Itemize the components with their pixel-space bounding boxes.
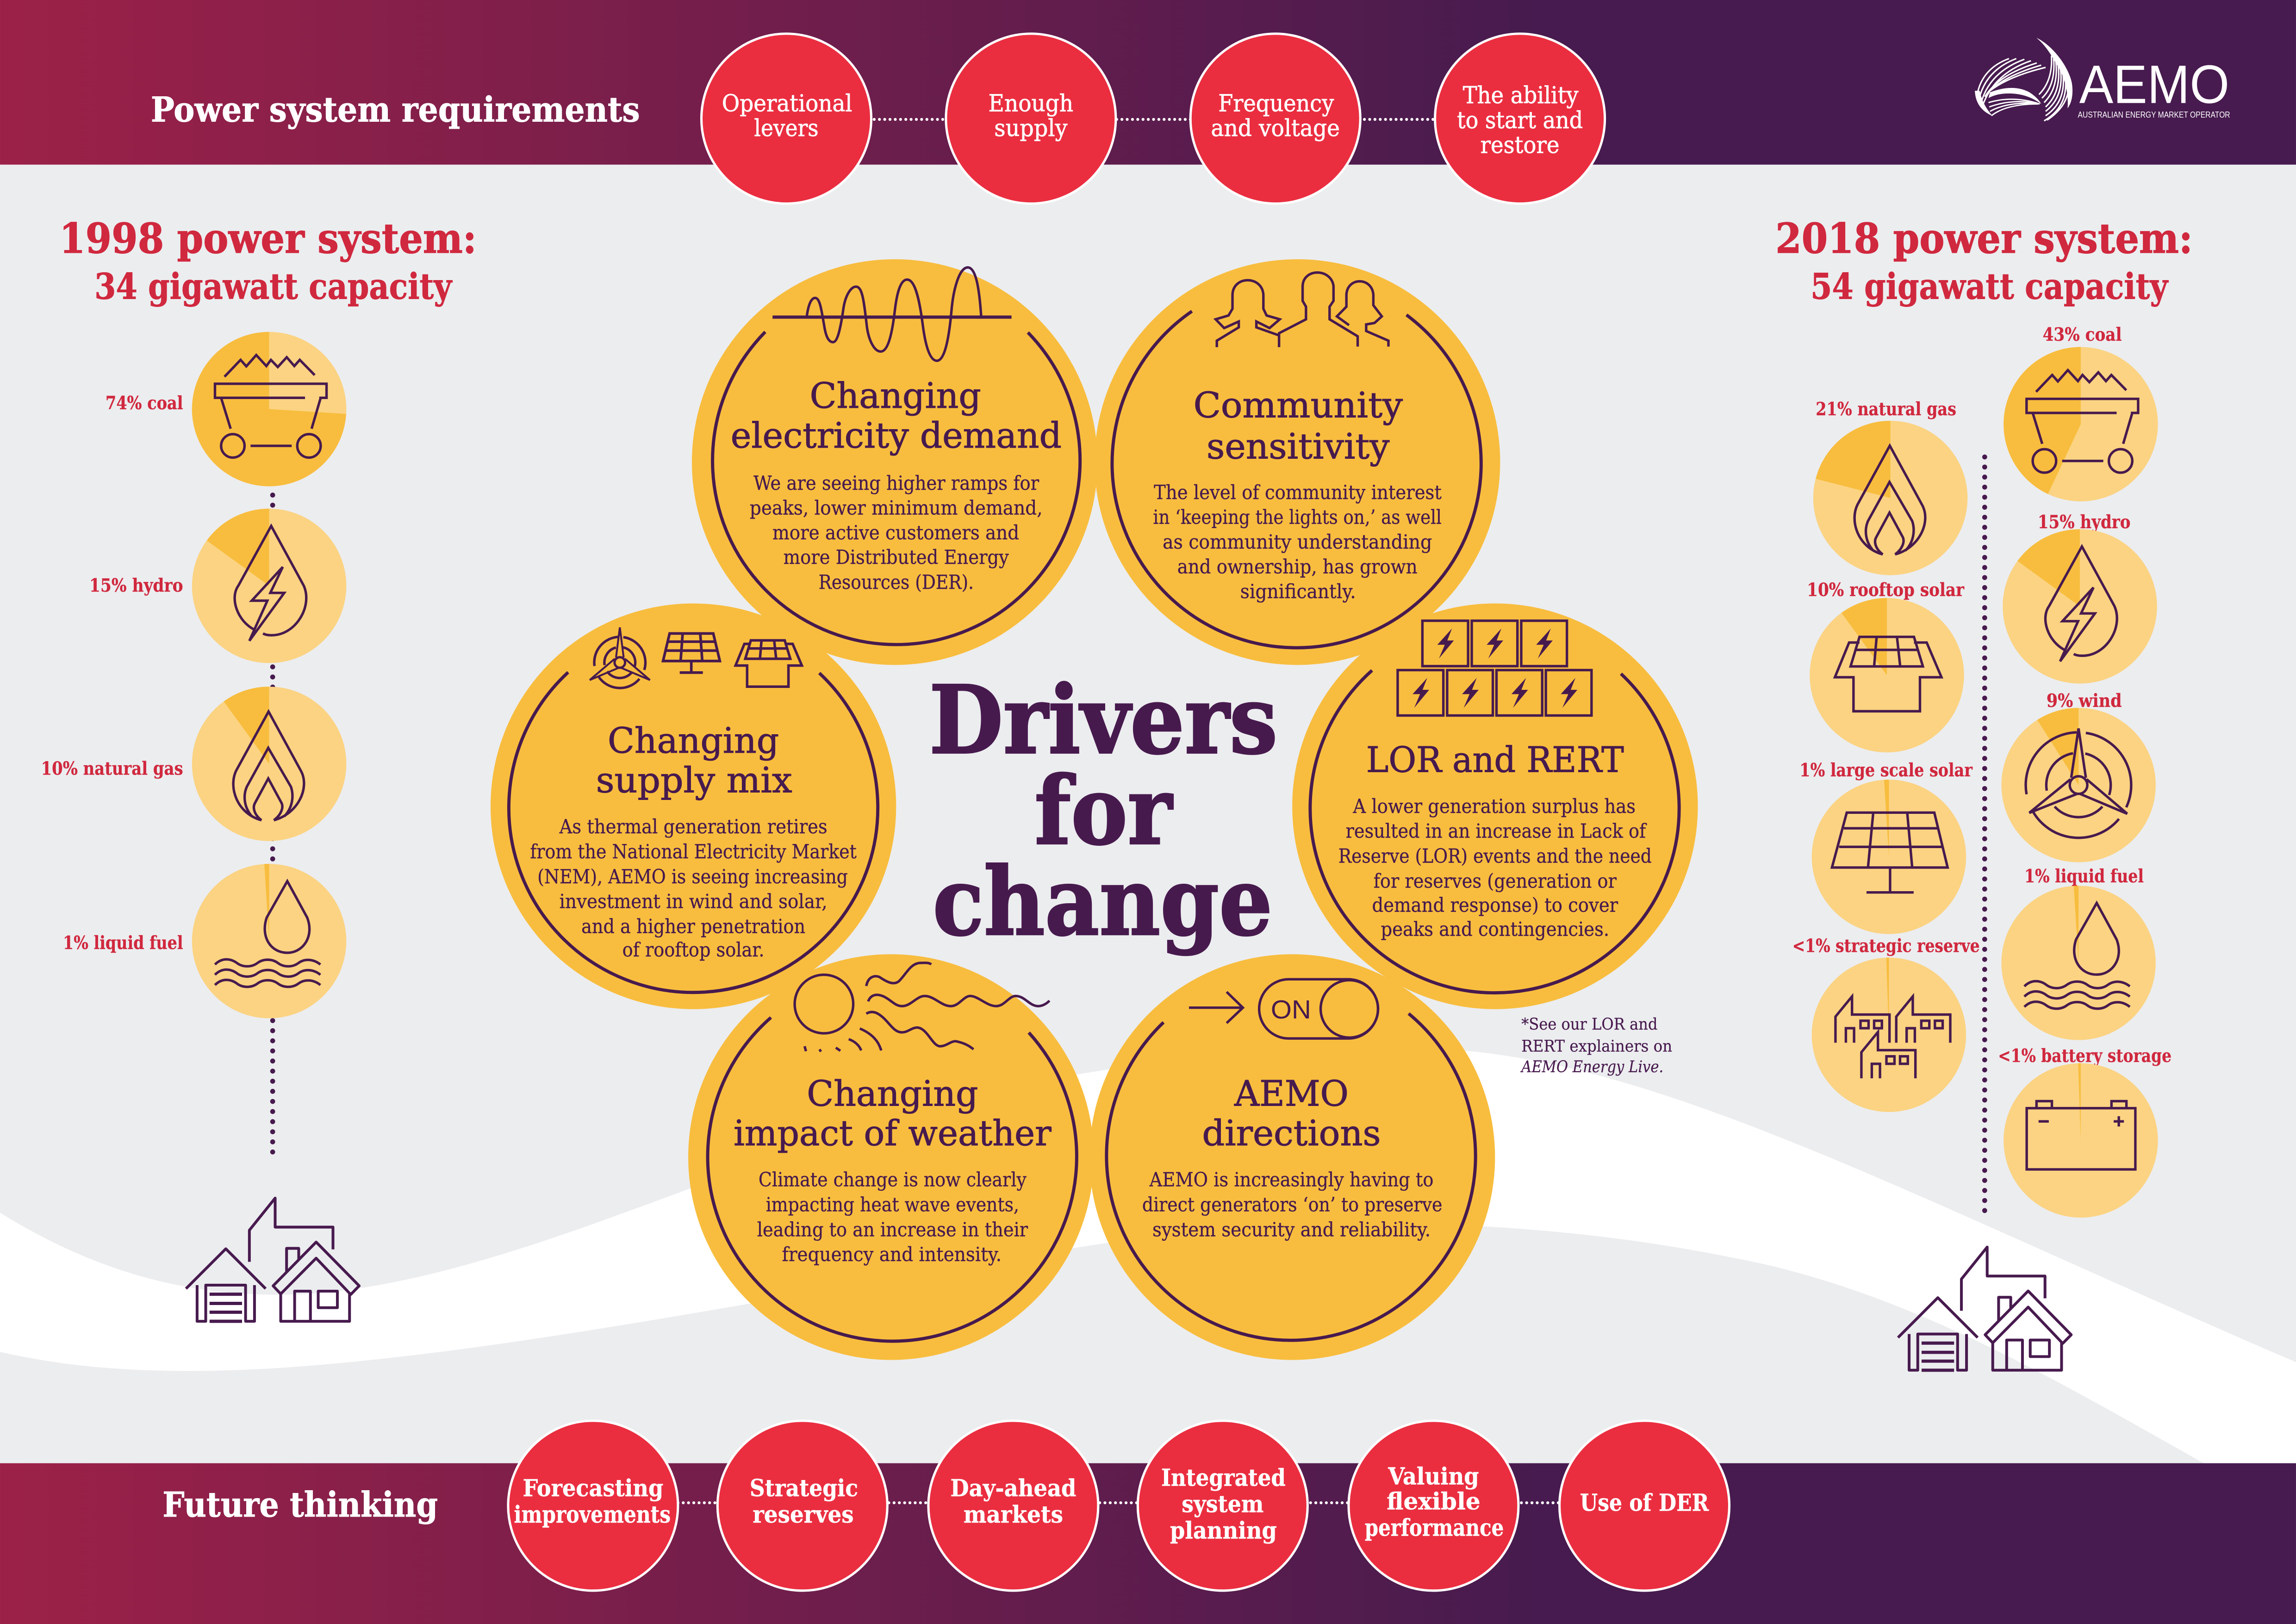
- icon: solar panel: [663, 633, 720, 673]
- item: forecasting improvements: improvements: [514, 1500, 671, 1528]
- requirement: ability to start and restore: The ability: [1463, 81, 1579, 109]
- panel: changing supply mix: [491, 604, 896, 1009]
- header band: power system requirements: [0, 0, 2296, 204]
- icon: on switch with arrow: [1189, 979, 1378, 1038]
- heading: 2018 power system: 2018 power system:: [1775, 214, 2193, 262]
- body text: more Distributed Energy: [784, 546, 1009, 568]
- footnote: LOR and RERT explainers: *See our LOR and: [1521, 1015, 1658, 1034]
- subheading: 54 gigawatt capacity: 54 gigawatt capacity: [1811, 266, 2169, 307]
- body text: peaks and contingencies.: [1381, 918, 1609, 941]
- footnote: LOR and RERT explainers: [1520, 1015, 1672, 1076]
- requirement: enough supply: [946, 34, 1116, 204]
- heading: Changing: [608, 720, 779, 761]
- body text: direct generators ‘on’ to preserve: [1142, 1193, 1442, 1216]
- requirement: frequency and voltage: Frequency: [1218, 89, 1334, 117]
- item: integrated system planning: system: [1182, 1490, 1263, 1518]
- body text: [1142, 1168, 1442, 1241]
- chart: 10% natural gas: 10% natural gas: [41, 758, 183, 780]
- heading: [731, 375, 1062, 456]
- chart: 10% rooftop solar: 10% rooftop solar: [1807, 580, 1965, 601]
- item: forecasting improvements: Forecasting: [523, 1474, 663, 1502]
- body text: leading to an increase in their: [757, 1218, 1028, 1241]
- central title: drivers for change: change: [933, 847, 1272, 957]
- item: use of DER: [1560, 1421, 1730, 1591]
- requirement: enough supply: Enough: [989, 89, 1073, 117]
- chart: 74% coal: [106, 332, 346, 486]
- chart: 9% wind: 9% wind: [2047, 690, 2122, 712]
- body text: and ownership, has grown: [1177, 556, 1418, 578]
- body text: for reserves (generation or: [1374, 869, 1617, 892]
- body text: Reserve (LOR) events and the need: [1338, 845, 1652, 868]
- body text: resulted in an increase in Lack of: [1346, 820, 1647, 843]
- chart: 1% liquid fuel: 1% liquid fuel: [63, 932, 183, 954]
- body text: significantly.: [1240, 580, 1356, 603]
- icon: homes 1998: [186, 1198, 359, 1321]
- item: day-ahead markets: markets: [964, 1500, 1063, 1528]
- chart: 1% liquid fuel: [63, 864, 346, 1018]
- heading: [1202, 1074, 1381, 1154]
- dotted connection line: [272, 495, 274, 1157]
- connector dots: [874, 119, 1464, 120]
- heading: future thinking: Future thinking: [162, 1484, 438, 1525]
- body text: (NEM), AEMO is seeing increasing: [537, 865, 848, 888]
- panel: community sensitivity: [1095, 259, 1500, 665]
- heading: sensitivity: [1207, 426, 1390, 467]
- heading: [596, 720, 792, 801]
- item: strategic reserves: Strategic: [750, 1474, 858, 1502]
- AEMO logo: AEMO: [2079, 54, 2229, 115]
- panel: 1998 power system: [41, 214, 477, 1321]
- body text: [530, 815, 857, 961]
- chart: less than 1% battery storage: [1998, 1045, 2172, 1218]
- chart: 1% large scale solar: [1799, 760, 1973, 934]
- body text: from the National Electricity Market: [530, 840, 857, 863]
- chart: 15% hydro: [89, 509, 346, 663]
- body text: [1153, 481, 1442, 603]
- body text: system security and reliability.: [1152, 1218, 1431, 1241]
- central title: drivers for change: for: [1034, 756, 1173, 866]
- central title: drivers for change: [929, 665, 1278, 957]
- heading: Changing: [807, 1074, 978, 1114]
- body text: investment in wind and solar,: [560, 890, 828, 913]
- item: strategic reserves: reserves: [753, 1500, 854, 1528]
- item: integrated system planning: Integrated: [1161, 1464, 1286, 1492]
- requirement: ability to start and restore: restore: [1481, 131, 1560, 159]
- body text: AEMO is increasingly having to: [1149, 1168, 1433, 1191]
- body text: We are seeing higher ramps for: [753, 472, 1039, 494]
- footer band: future thinking: [0, 1421, 2296, 1624]
- heading: 1998 power system: 1998 power system:: [59, 214, 477, 262]
- requirement: enough supply: supply: [994, 114, 1068, 142]
- requirement: frequency and voltage: and voltage: [1211, 114, 1340, 142]
- item: integrated system planning: planning: [1170, 1517, 1277, 1544]
- icon: homes 2018: [1898, 1247, 2071, 1370]
- body text: peaks, lower minimum demand,: [750, 496, 1043, 519]
- item: day-ahead markets: Day-ahead: [950, 1474, 1076, 1502]
- chart: 1% liquid fuel: [2001, 866, 2156, 1040]
- body text: Climate change is now clearly: [759, 1168, 1027, 1191]
- panel: AEMO directions: [1089, 954, 1495, 1360]
- chart: 74% coal: 74% coal: [106, 393, 183, 414]
- chart: 1% liquid fuel: 1% liquid fuel: [2024, 866, 2144, 887]
- item: valuing flexible performance: flexible: [1387, 1487, 1481, 1515]
- central title: drivers for change: Drivers: [929, 665, 1278, 775]
- body text: The level of community interest: [1154, 481, 1442, 504]
- icon: wind turbine: [590, 627, 650, 688]
- requirement: ability to start and restore: [1435, 34, 1605, 204]
- heading: electricity demand: [731, 415, 1062, 456]
- icon: on switch with arrow: ON: [1271, 995, 1311, 1024]
- heading: [734, 1074, 1052, 1154]
- heading: [1194, 385, 1403, 467]
- item: strategic reserves: [717, 1421, 887, 1591]
- body text: as community understanding: [1163, 531, 1432, 553]
- body text: and a higher penetration: [581, 915, 805, 937]
- body text: A lower generation surplus has: [1353, 795, 1636, 818]
- subheading: 34 gigawatt capacity: 34 gigawatt capacity: [94, 266, 453, 307]
- body text: Resources (DER).: [819, 571, 974, 593]
- footnote: LOR and RERT explainers: AEMO Energy Live.: [1520, 1058, 1663, 1076]
- AEMO logo: [1975, 38, 2230, 121]
- chart: 43% coal: [2004, 324, 2158, 501]
- body text: [757, 1168, 1028, 1266]
- body text: demand response) to cover: [1372, 894, 1618, 917]
- requirement: operational levers: Operational: [722, 89, 852, 117]
- heading: directions: [1202, 1113, 1381, 1154]
- heading: power system requirements: Power system requirements: [151, 89, 640, 130]
- item: use of DER: Use of DER: [1580, 1489, 1709, 1517]
- panel: changing electricity demand: [692, 259, 1097, 665]
- chart: 15% hydro: [2003, 512, 2157, 684]
- chart: 43% coal: 43% coal: [2043, 324, 2122, 345]
- body text: [1338, 795, 1652, 941]
- body text: of rooftop solar.: [622, 938, 765, 961]
- chart: 10% natural gas: [41, 687, 346, 841]
- chart: 15% hydro: 15% hydro: [89, 575, 183, 596]
- panel: changing impact of weather: [688, 954, 1094, 1360]
- body text: As thermal generation retires: [559, 815, 828, 838]
- heading: impact of weather: [734, 1113, 1052, 1154]
- AEMO logo: AUSTRALIAN ENERGY MARKET OPERATOR: [2078, 110, 2230, 119]
- heading: LOR and RERT: [1366, 739, 1624, 780]
- chart: less than 1% battery storage: <1% battery storage: [1998, 1045, 2172, 1067]
- body text: frequency and intensity.: [782, 1243, 1002, 1266]
- item: valuing flexible performance: performance: [1365, 1513, 1504, 1541]
- icon: sun and heat waves: [795, 963, 1050, 1052]
- chart: 15% hydro: 15% hydro: [2038, 512, 2130, 533]
- icon: rooftop solar: [735, 640, 802, 687]
- chart: 21% natural gas: [1813, 399, 1967, 575]
- body text: more active customers and: [772, 521, 1019, 544]
- item: integrated system planning: [1138, 1421, 1307, 1591]
- body text: [750, 472, 1043, 593]
- requirement: operational levers: levers: [754, 114, 819, 142]
- heading: Community: [1194, 385, 1403, 426]
- panel: 2018 power system: [1775, 214, 2193, 1370]
- requirement: operational levers: [702, 34, 871, 204]
- chart: less than 1% strategic reserve: <1% strategic reserve: [1792, 936, 1980, 957]
- icon: electricity waveform: [772, 268, 1012, 361]
- heading: AEMO: [1234, 1074, 1349, 1114]
- icon: people: [1216, 273, 1388, 347]
- chart: 10% rooftop solar: [1807, 580, 1965, 752]
- dotted connection line: [1984, 457, 1985, 1220]
- connector dots: [678, 1502, 1561, 1503]
- item: forecasting improvements: [508, 1421, 678, 1591]
- chart: less than 1% strategic reserve: [1792, 936, 1980, 1112]
- item: valuing flexible performance: [1349, 1421, 1518, 1591]
- footnote: LOR and RERT explainers: RERT explainers on: [1521, 1037, 1672, 1056]
- requirement: frequency and voltage: [1190, 34, 1360, 204]
- panel: LOR and RERT: [1292, 604, 1698, 1009]
- body text: in ‘keeping the lights on,’ as well: [1153, 506, 1442, 529]
- chart: 21% natural gas: 21% natural gas: [1816, 399, 1956, 420]
- chart: 1% large scale solar: 1% large scale solar: [1799, 760, 1973, 781]
- requirement: ability to start and restore: to start and: [1457, 106, 1583, 134]
- item: day-ahead markets: [928, 1421, 1098, 1591]
- item: valuing flexible performance: Valuing: [1388, 1462, 1479, 1490]
- icon: battery cells: [1398, 621, 1592, 716]
- chart: 9% wind: [2001, 690, 2156, 862]
- heading: supply mix: [596, 760, 792, 801]
- white swoosh background: [0, 1048, 2296, 1463]
- heading: Changing: [810, 375, 981, 416]
- body text: impacting heat wave events,: [766, 1193, 1019, 1216]
